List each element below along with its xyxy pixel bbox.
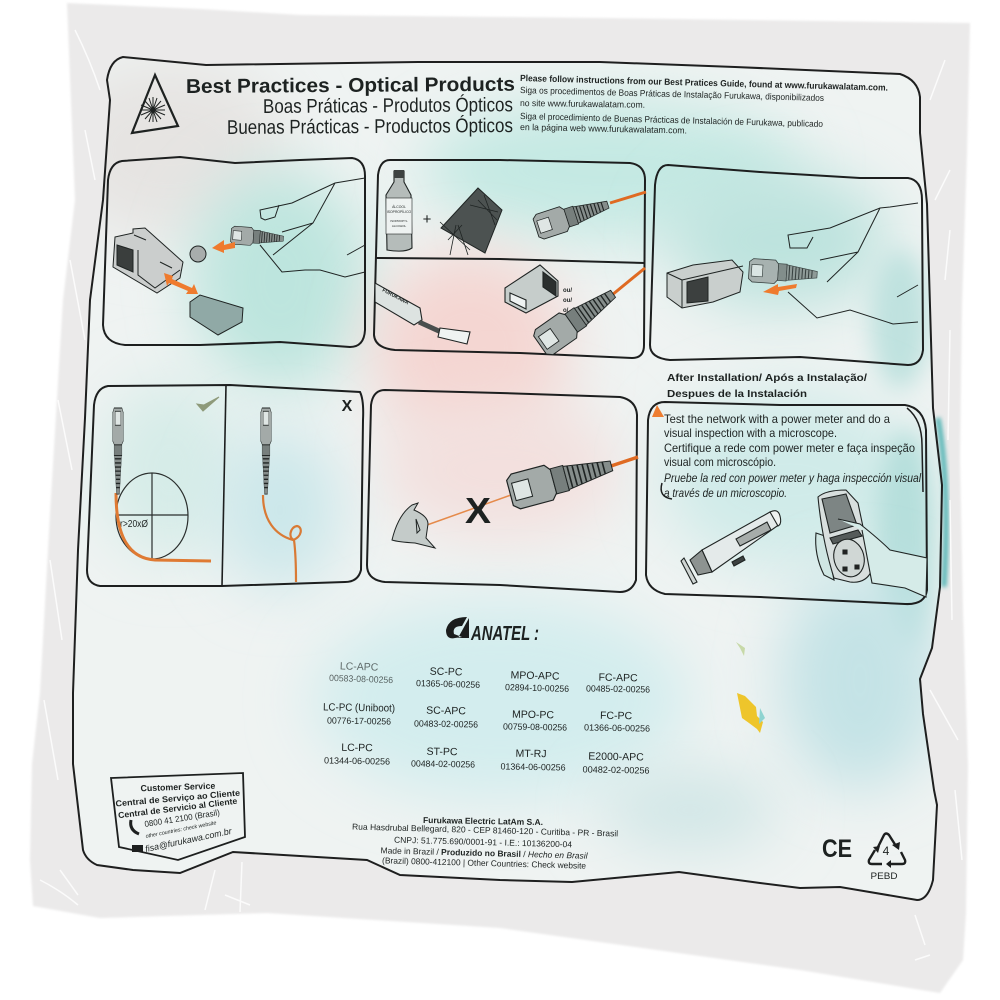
divider	[375, 258, 645, 263]
row: LC-PC: 01364-06-00256	[500, 761, 566, 773]
service headings: Central de Servicio al Cliente	[117, 796, 238, 820]
icon: anatel mark	[446, 617, 469, 638]
icon: cleaning pen: FURUKAWA	[381, 287, 410, 307]
divider	[222, 385, 226, 586]
icon: cleaning pen	[375, 283, 470, 344]
service headings	[115, 781, 241, 820]
row: LC-PC: MT-RJ	[515, 748, 547, 760]
orange double arrow	[164, 273, 198, 294]
icon: laser warning triangle	[132, 75, 178, 133]
icon: adapter cap	[190, 295, 243, 335]
radius label: r>20xØ	[120, 518, 148, 530]
fibre	[611, 457, 638, 466]
company address block: Rua Hasdrubal Bellegard, 820 - CEP 81460-120 - Curitiba - PR - Brasil	[352, 822, 618, 838]
after-installation heading	[667, 372, 867, 400]
row: LC-PC: 00484-02-00256	[411, 758, 475, 770]
guide instructions text: Siga os procedimentos de Boas Práticas de Instalação Furukawa, disponibilizados	[520, 85, 825, 103]
inner bracket left	[661, 483, 672, 499]
company address block	[352, 815, 618, 871]
icon: alcohol bottle: ÁLCOOL	[392, 205, 406, 209]
icon: connector with fibre	[532, 192, 646, 240]
instruction text: visual inspection with a microscope.	[664, 426, 837, 440]
connector	[261, 408, 271, 494]
row: LC-APC: FC-APC	[598, 672, 638, 684]
row: LC-APC: SC-PC	[430, 666, 463, 678]
row: LC-APC: LC-APC	[340, 660, 379, 674]
row: LC-APC	[329, 660, 650, 695]
icon: adapter	[113, 228, 183, 293]
cable seen through bag	[938, 418, 946, 587]
row: LC-APC: 00485-02-00256	[586, 683, 650, 695]
orange arrow	[763, 284, 797, 295]
email: fisa@furukawa.com.br	[144, 826, 233, 854]
yellow residue speck	[736, 642, 765, 733]
panel: cleaning	[374, 160, 646, 358]
icon: eye	[392, 503, 435, 548]
tinted label area	[74, 63, 941, 899]
connector	[113, 408, 123, 494]
icon: hand	[260, 178, 365, 277]
icon: adapter	[667, 260, 743, 308]
plus sign: +	[423, 211, 432, 228]
title: English: Best Practices - Optical Products	[186, 74, 515, 98]
row: LC-APC: 01365-06-00256	[416, 678, 480, 690]
panel: remove dust caps	[103, 157, 365, 347]
panel: insert connector	[650, 165, 923, 365]
company address block: Made in Brazil / Produzido no Brasil / Hecho en Brasil	[380, 845, 589, 861]
instruction text: Certifique a rede com power meter e faça inspeção	[664, 441, 915, 455]
title: Spanish: Buenas Prácticas - Productos Ópticos	[227, 114, 513, 139]
row: LC-APC: 00583-08-00256	[329, 673, 393, 685]
connector	[505, 448, 616, 510]
service headings: Central de Serviço ao Cliente	[115, 788, 241, 808]
row: LC-PC Uniboot: MPO-PC	[512, 709, 555, 721]
CE mark: CE	[822, 835, 852, 863]
ou/ labels: ou/	[563, 298, 572, 304]
icon: adapter	[505, 265, 558, 313]
ANATEL logo and heading	[446, 617, 539, 645]
recycling symbol PEBD 4: PEBD	[870, 871, 898, 882]
icon: phone	[131, 820, 139, 834]
ou/ labels	[563, 288, 572, 314]
panel: after installation	[646, 402, 927, 604]
row: LC-APC: 02894-10-00256	[505, 682, 569, 694]
instruction text: a través de un microscopio.	[664, 486, 787, 500]
panel: fibre bend radius	[87, 385, 363, 586]
row: LC-APC: MPO-APC	[510, 669, 560, 683]
guide instructions text: Please follow instructions from our Best Pratices Guide, found at www.furukawalatam.com.	[520, 73, 888, 93]
row: LC-PC Uniboot	[323, 701, 650, 734]
correct fibre bend	[116, 493, 211, 561]
connector homologation table	[323, 660, 650, 776]
company address block: CNPJ: 51.775.690/0001-91 - I.E.: 10136200-04	[394, 835, 572, 849]
row: LC-PC: E2000-APC	[588, 751, 644, 763]
row: LC-PC	[324, 742, 650, 776]
icon: alcohol bottle: ISOPROPYL	[390, 219, 408, 223]
printed label outline	[73, 57, 942, 900]
row: LC-PC Uniboot: 01366-06-00256	[584, 722, 650, 734]
icon: connector with fibre	[531, 268, 645, 358]
orange arrow: cap off	[212, 240, 235, 253]
icon: connector held by hand	[230, 226, 284, 248]
row: LC-PC Uniboot: SC-APC	[426, 705, 466, 717]
phone number: 0800 41 2100 (Brasil)	[144, 807, 221, 829]
after-installation heading: Despues de la Instalación	[667, 388, 807, 400]
row: LC-PC Uniboot: 00776-17-00256	[327, 715, 391, 727]
icon: alcohol bottle	[386, 170, 412, 251]
laser beam	[427, 495, 511, 525]
wrong fibre loop	[263, 495, 301, 582]
recycling symbol PEBD 4	[869, 834, 905, 882]
bend circle	[116, 473, 188, 559]
instruction text: Test the network with a power meter and do a	[664, 412, 890, 426]
row: LC-PC Uniboot: 00483-02-00256	[414, 718, 478, 730]
row: LC-PC: LC-PC	[341, 742, 373, 754]
icon: hand	[788, 203, 918, 324]
ou/ labels: ou/	[563, 288, 572, 294]
row: LC-PC Uniboot: LC-PC (Uniboot)	[323, 701, 395, 715]
wrong mark X: X	[465, 490, 491, 531]
header	[132, 73, 888, 139]
row: LC-PC: 01344-06-00256	[324, 755, 390, 767]
company address block: Furukawa Electric LatAm S.A.	[423, 815, 543, 827]
icon: connector cap	[190, 246, 206, 262]
row: LC-PC: 00482-02-00256	[582, 764, 650, 776]
guide instructions text: en la página web www.furukawalatam.com.	[520, 122, 687, 135]
wrong mark X: X	[342, 398, 353, 415]
customer service box	[111, 773, 245, 860]
ou/ labels: o/	[563, 308, 569, 314]
recycling symbol PEBD 4: 4	[883, 844, 890, 858]
icon: warning triangle	[652, 405, 664, 417]
row: LC-PC: ST-PC	[426, 746, 458, 758]
instruction text: visual com microscópio.	[664, 455, 776, 469]
anatel wordmark: ANATEL :	[470, 623, 539, 645]
guide instructions text	[520, 73, 888, 135]
title: Portuguese: Boas Práticas - Produtos Ópticos	[263, 93, 513, 118]
instruction text	[664, 412, 921, 500]
instruction text: Pruebe la red con power meter y haga inspección visual	[664, 471, 921, 485]
guide instructions text: no site www.furukawalatam.com.	[520, 98, 645, 110]
guide instructions text: Siga el procedimiento de Buenas Prácticas de Instalación de Furukawa, publicado	[520, 111, 823, 129]
other countries note: other countries: check website	[145, 820, 217, 840]
icon: alcohol bottle: ALCOHOL	[392, 224, 406, 228]
service headings: Customer Service	[140, 781, 216, 793]
icon: power meter in hand	[816, 490, 927, 597]
icon: microscope	[681, 511, 781, 584]
icon: alcohol bottle: ISOPROPÍLICO	[387, 210, 412, 214]
icon: envelope	[132, 845, 143, 852]
icon: check mark	[197, 397, 219, 411]
inner bracket right	[907, 408, 923, 492]
row: LC-PC Uniboot: 00759-08-00256	[503, 721, 567, 733]
icon: connector	[748, 258, 818, 286]
icon: cleaning cloth	[440, 188, 502, 255]
panel: do not look into fibre	[367, 390, 638, 592]
row: LC-PC Uniboot: FC-PC	[600, 710, 633, 722]
after-installation heading: After Installation/ Após a Instalação/	[667, 372, 867, 384]
company address block: (Brazil) 0800-412100 | Other Countries: Check website	[382, 855, 586, 871]
